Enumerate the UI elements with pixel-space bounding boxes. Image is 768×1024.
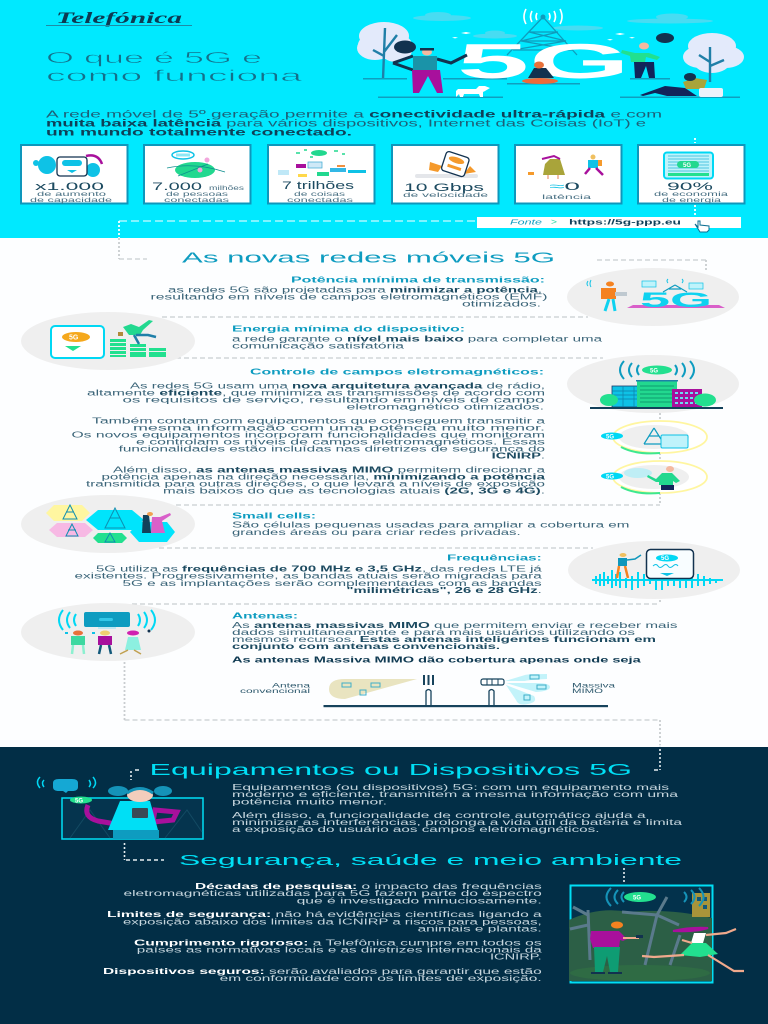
stat card: capacity: de capacidade <box>30 197 112 204</box>
illustration: transmit power: 5G <box>640 289 712 312</box>
stat card: capacity: de aumento <box>37 191 106 198</box>
text: Controle de campos: funcionalidades estão incluídas nas diretrizes de segurança do <box>119 444 546 453</box>
header panel <box>0 0 768 238</box>
connector: header dashes <box>119 138 695 238</box>
text: Controle de campos: Também contam com equipamentos que conseguem transmitir a <box>92 416 546 425</box>
seated person with bag <box>640 73 723 97</box>
illustration: frequency waves <box>568 541 740 599</box>
text: devices: potência muito menor. <box>232 797 387 806</box>
text: safety: países as normativas locais e as diretrizes internacionais da <box>137 945 543 954</box>
text: Small cells: grandes áreas ou para criar redes privadas. <box>232 528 521 537</box>
text: safety: em conformidade com os limites de exposição. <box>220 974 542 983</box>
text: safety: Décadas de pesquisa: o impacto das frequências <box>195 882 542 891</box>
source bar <box>477 217 741 232</box>
illustration: girl with tablet: 5G <box>75 798 83 804</box>
text: Controle de campos: os requisitos de serviço, resultando em níveis de campo <box>122 395 546 404</box>
illustration: tower in yellow ring: 5G <box>606 434 614 440</box>
illustration: transmit power <box>567 268 739 326</box>
text: devices: moderno e eficiente, transmitem a mesma informação com uma <box>232 790 679 799</box>
illustration: city buildings: 5G <box>650 368 658 374</box>
section heading: As novas redes móveis 5G: As novas redes móveis 5G <box>182 250 555 266</box>
text: Controle de campos: Controle de campos eletromagnéticos: <box>250 367 544 376</box>
stat card: people <box>144 145 250 204</box>
source bar: https://5g-ppp.eu <box>569 218 682 226</box>
title <box>46 50 302 85</box>
text: Controle de campos: Além disso, as antenas massivas MIMO permitem direcionar a <box>113 465 546 474</box>
intro text: A rede móvel de 5º geração permite a conectividade ultra-rápida e com <box>46 110 662 120</box>
stat card: people: 7.000 <box>152 181 202 193</box>
dog <box>456 86 490 97</box>
text: Energia mínima <box>232 324 603 350</box>
diagram: conventional vs massive MIMO antennas: MIMO <box>572 688 603 695</box>
hero illustration: 5G people and tower: 5G <box>457 35 630 89</box>
text: Controle de campos: eletromagnético otimizados. <box>346 402 544 411</box>
stat card: energy: de energia <box>662 197 721 204</box>
icon: phone with gears <box>33 155 102 177</box>
text: Antenas: As antenas Massiva MIMO dão cobertura apenas onde seja <box>232 656 642 664</box>
text: Potência mínima: Potência mínima de transmissão: <box>291 275 545 284</box>
stat card: things: 7 trilhões <box>282 180 355 192</box>
text: Antenas: Antenas: <box>232 611 298 620</box>
text: Frequências: Frequências: <box>447 553 542 562</box>
heading: Segurança, saúde e meio ambiente: Segurança, saúde e meio ambiente <box>179 852 682 869</box>
text: Energia mínima: a rede garante o nível mais baixo para completar uma <box>232 334 603 343</box>
person in green <box>621 33 674 78</box>
sitting girl <box>522 62 558 84</box>
illustration: user in yellow ring: 5G <box>606 474 614 480</box>
illustration: device phone and bars: 5G <box>69 334 79 342</box>
stat card: energy: 90% <box>667 181 713 193</box>
icon: connected devices <box>278 150 366 177</box>
stat card: latency <box>515 145 622 204</box>
text: Energia mínima: Energia mínima do dispositivo: <box>232 324 465 333</box>
illustration: city buildings <box>567 355 739 413</box>
text: Energia mínima: comunicação satisfatória <box>232 341 405 350</box>
illustration: tower in yellow ring <box>601 421 707 453</box>
text: safety: ICNIRP. <box>490 952 542 961</box>
illustration: frequency waves: 5G <box>661 556 669 562</box>
illustration: antenna and people <box>21 603 195 661</box>
title: como funciona <box>46 68 302 85</box>
text: Controle de campos: transmitida para outras direções, o que levará a níveis de exposição <box>86 479 546 488</box>
text: safety: animais e plantas. <box>418 924 542 933</box>
icon: globe <box>167 151 225 178</box>
stat card: speed <box>392 145 498 204</box>
text: Antenas: conjunto com antenas convencionais. <box>232 642 500 651</box>
text: safety <box>103 882 543 983</box>
text: Frequências <box>74 553 543 595</box>
text: Frequências: "milimétricas", 26 e 28 GHz . <box>346 586 542 595</box>
stat card: people: conectadas <box>164 197 230 204</box>
title: O que é 5G e <box>46 50 262 67</box>
illustration: people outdoors with 5G <box>569 886 744 982</box>
stat card: things <box>268 145 374 204</box>
stat card: capacity: x1.000 <box>35 181 104 193</box>
text: Potência mínima: otimizados. <box>462 299 541 308</box>
text: Potência mínima: as redes 5G são projetadas para minimizar a potência , <box>168 285 542 294</box>
text: Controle de campos <box>72 367 546 495</box>
stat card: things: conectadas <box>287 197 354 204</box>
text: Controle de campos: e controlam os níveis de campos eletromagnéticos. Essas <box>136 437 545 446</box>
stat card: latency: latência <box>542 194 591 201</box>
text: Small cells: São células pequenas usadas para ampliar a cobertura em <box>232 520 630 529</box>
connectors: white dotted lines <box>124 745 660 882</box>
stat card: capacity <box>21 145 128 204</box>
text: Controle de campos: mais baixos do que as tecnologias atuais (2G, 3G e 4G) . <box>163 486 545 495</box>
stat card: people: milhões <box>209 186 244 192</box>
intro text: um mundo totalmente conectado. <box>46 128 352 138</box>
heading: Equipamentos ou Dispositivos 5G: Equipamentos ou Dispositivos 5G <box>150 762 632 779</box>
icon: battery: 5G <box>683 163 691 169</box>
diagram: conventional vs massive MIMO antennas: Massiva <box>572 682 616 690</box>
text: devices: a exposição do usuário aos campos eletromagnéticos. <box>232 825 600 834</box>
hero illustration: 5G people and tower <box>357 9 744 98</box>
text: Small cells: Small cells: <box>232 511 316 520</box>
logo: Telefónica: Telefónica <box>56 10 182 27</box>
diagram: conventional vs massive MIMO antennas: Antena <box>272 682 311 690</box>
intro text: muita baixa latência para vários dispositivos, Internet das Coisas (IoT) e <box>46 118 647 130</box>
text: safety: eletromagnéticas utilizadas para 5G fazem parte do espectro <box>124 889 543 898</box>
connectors: gray dashed lines <box>119 238 706 745</box>
stat card: latency: ≈ 0 <box>549 181 580 193</box>
text: Controle de campos: altamente eficiente , que minimiza as transmissões de acordo com <box>87 388 546 397</box>
text: Small cells <box>232 511 630 537</box>
icon: hand cursor <box>695 221 709 232</box>
text: devices: Equipamentos (ou dispositivos) 5G: com um equipamento mais <box>232 783 669 792</box>
icon: woman and runner <box>528 154 603 179</box>
text: Frequências: 5G e as implantações serão complementadas com as bandas <box>122 579 542 588</box>
stat card: energy: de economia <box>654 191 728 198</box>
person with phone <box>393 40 467 93</box>
stat card: things: de coisas <box>294 191 346 198</box>
text: devices: Além disso, a funcionalidade de controle automático ajuda a <box>232 811 647 820</box>
illustration: user in yellow ring <box>601 461 707 493</box>
text: safety: exposição abaixo dos limites da ICNIRP a riscos para pessoas, <box>123 917 542 926</box>
text: Controle de campos: ICNIRP . <box>492 451 545 460</box>
text: Controle de campos: As redes 5G usam uma nova arquitetura avançada de rádio, <box>130 381 545 390</box>
text: Controle de campos: mesma informação com uma potência muito menor. <box>133 423 545 432</box>
text: safety: Dispositivos seguros: serão avaliados para garantir que estão <box>103 967 543 976</box>
diagram: conventional vs massive MIMO antennas <box>240 674 616 707</box>
text: Antenas: mesmos recursos. Estas antenas inteligentes funcionam em <box>232 635 656 644</box>
text: safety: Cumprimento rigoroso: a Telefônica cumpre em todos os <box>134 938 542 947</box>
illustration: girl with tablet <box>38 777 203 839</box>
panel: dark lower section <box>0 745 768 1024</box>
text: safety: que é investigado minuciosamente. <box>297 896 542 905</box>
source bar: Fonte <box>510 218 542 226</box>
intro text <box>46 110 662 138</box>
text: Potência mínima: resultando em níveis de campos eletromagnéticos (EMF) <box>150 292 548 301</box>
text: Controle de campos: potência apenas na direção necessária, minimizando a potência <box>102 472 546 481</box>
text: devices: minimizar as interferências, prolonga a vida útil da bateria e limita <box>232 818 683 827</box>
stat card: speed: 10 Gbps <box>404 182 485 194</box>
text: Controle de campos: Os novos equipamentos incorporam funcionalidades que monitoram <box>72 430 546 439</box>
text: Antenas: As antenas massivas MIMO que permitem enviar e receber mais <box>232 621 678 630</box>
text: safety: Limites de segurança: não há evidências científicas ligando a <box>107 910 543 919</box>
icon: phone rocket <box>415 151 478 178</box>
illustration: small cells hexagons <box>21 495 195 553</box>
stat card: energy <box>638 145 744 204</box>
illustration: device phone and bars <box>21 312 195 370</box>
text: Frequências: 5G utiliza as frequências de 700 MHz e 3,5 GHz , das redes LTE já <box>96 564 543 573</box>
text: Frequências: existentes. Progressivamente, as bandas atuais serão migradas para <box>74 571 543 580</box>
text: Antenas: dados simultaneamente e para mais usuários utilizando os <box>232 628 635 637</box>
source bar: > <box>551 218 557 226</box>
text: Antenas <box>232 611 678 664</box>
illustration: people outdoors with 5G: 5G <box>633 896 641 902</box>
text: Potência mínima <box>150 275 548 308</box>
stat card: people: de pessoas <box>166 191 229 198</box>
text: devices <box>232 783 683 834</box>
stat card: speed: de velocidade <box>403 192 488 199</box>
diagram: conventional vs massive MIMO antennas: convencional <box>240 688 310 695</box>
